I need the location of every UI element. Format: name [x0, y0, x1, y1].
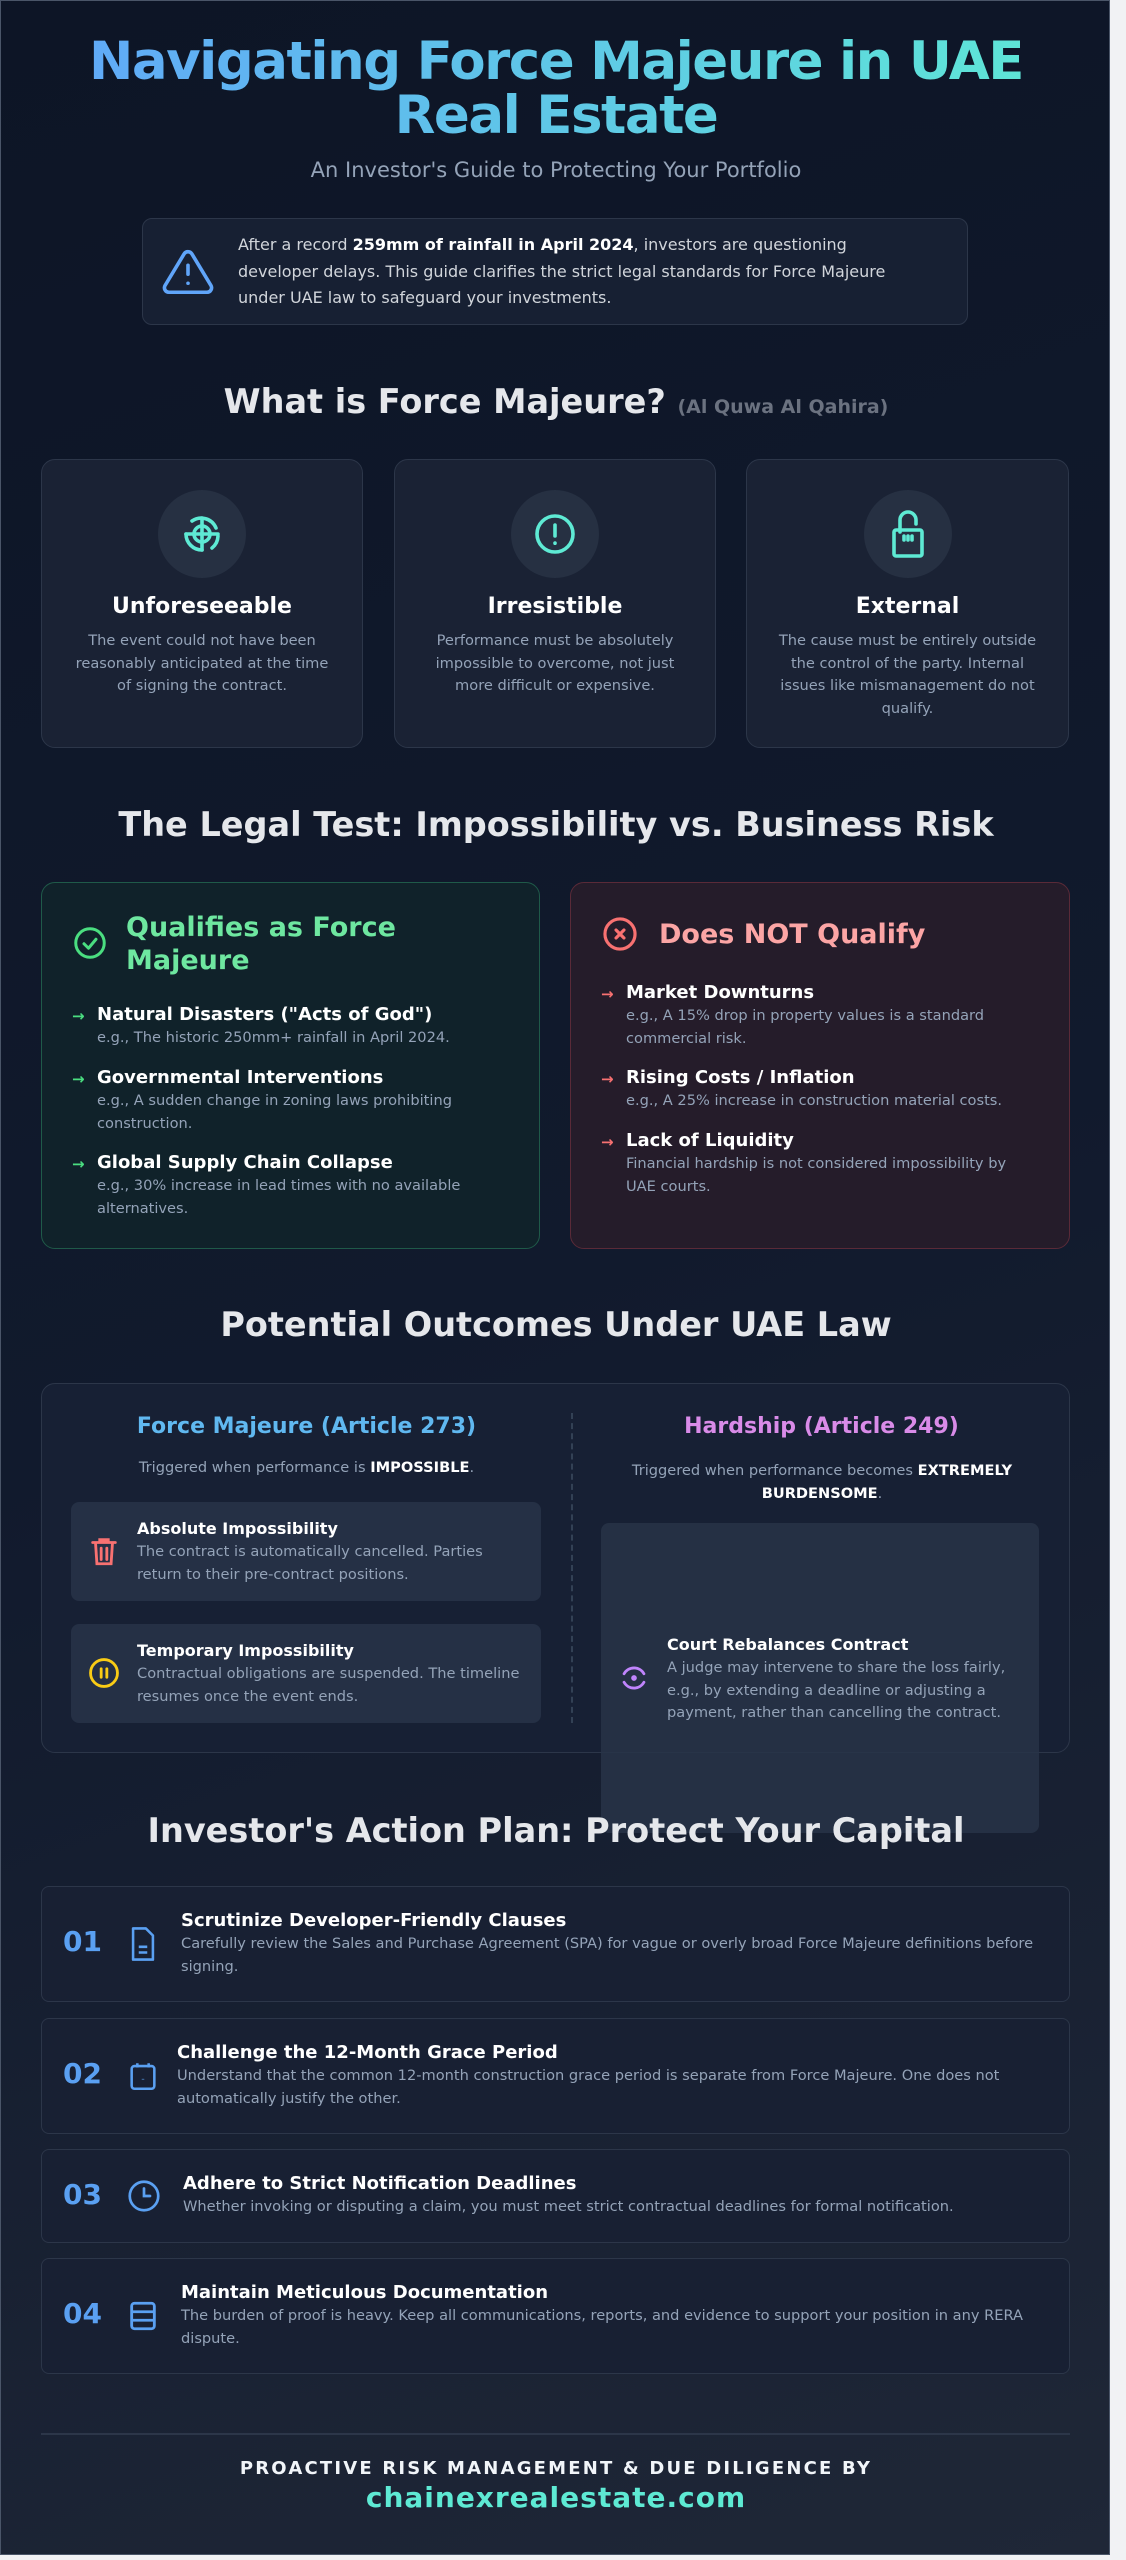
sub-card: court rebalances: Court Rebalances Contract	[667, 1635, 908, 1654]
panel: external	[746, 459, 1069, 748]
heading: what is force majeure: What is Force Majeure? (Al Quwa Al Qahira)	[224, 382, 888, 421]
action 04: The burden of proof is heavy. Keep all communications, reports, and evidence to support your position in any RERA dispute.	[181, 2307, 1023, 2346]
title: Navigating Force Majeure in UAE	[89, 31, 1023, 92]
panel: irresistible: Irresistible	[488, 594, 622, 619]
icon: database	[130, 2302, 156, 2330]
sub-card: temporary	[71, 1624, 541, 1723]
action 02: Challenge the 12-Month Grace Period	[177, 2042, 558, 2063]
panel title	[126, 912, 396, 976]
panel: unforeseeable	[41, 459, 363, 748]
item: Natural Disasters ("Acts of God")	[97, 1004, 432, 1025]
action 01: Scrutinize Developer-Friendly Clauses	[181, 1910, 566, 1931]
item: →	[601, 1070, 614, 1088]
footer: chainexrealestate.com	[366, 2481, 746, 2514]
item: →	[601, 985, 614, 1003]
action 03: Whether invoking or disputing a claim, you must meet strict contractual deadlines for formal notification.	[183, 2198, 954, 2215]
sub-card: temporary: Temporary Impossibility	[137, 1641, 354, 1660]
icon: rebalance	[622, 1666, 646, 1690]
action 03: 03	[63, 2178, 102, 2211]
sub-card: absolute: Absolute Impossibility	[137, 1519, 338, 1538]
action 02	[41, 2018, 1070, 2134]
footer: PROACTIVE RISK MANAGEMENT & DUE DILIGENCE BY	[240, 2458, 872, 2479]
item: →	[72, 1007, 85, 1025]
sub-card: court rebalances	[601, 1523, 1039, 1833]
heading: action plan: Investor's Action Plan: Protect Your Capital	[148, 1811, 964, 1850]
icon: trash	[91, 1538, 117, 1566]
item	[72, 1067, 452, 1132]
heading: outcomes: Potential Outcomes Under UAE Law	[220, 1305, 892, 1344]
divider	[571, 1413, 573, 1723]
item: e.g., The historic 250mm+ rainfall in April 2024.	[97, 1029, 450, 1046]
icon: lock	[864, 490, 952, 578]
action 01: Carefully review the Sales and Purchase Agreement (SPA) for vague or overly broad Force Majeure definitions before signing.	[181, 1935, 1033, 1974]
item: Lack of Liquidity	[626, 1130, 794, 1151]
item: Financial hardship is not considered impossibility by UAE courts.	[626, 1155, 1006, 1194]
panel: external: The cause must be entirely outside the control of the party. Internal issues like mismanagement do not qualify.	[779, 632, 1036, 716]
action 04: 04	[63, 2297, 102, 2330]
title	[1, 35, 1111, 143]
panel title: Majeure	[126, 945, 250, 976]
item: e.g., A 15% drop in property values is a standard commercial risk.	[626, 1007, 984, 1046]
panel: outcomes	[41, 1383, 1070, 1753]
panel: irresistible	[394, 459, 716, 748]
panel: qualifies	[41, 882, 540, 1249]
icon: check circle	[74, 927, 106, 959]
item	[72, 1152, 460, 1216]
panel: unforeseeable: Unforeseeable	[112, 594, 292, 619]
icon: pause	[89, 1658, 119, 1688]
right column title: Hardship (Article 249)	[684, 1414, 959, 1439]
panel: unforeseeable: The event could not have been reasonably anticipated at the time of signing the contract.	[76, 632, 328, 694]
panel: irresistible: Performance must be absolutely impossible to overcome, not just more difficult or expensive.	[436, 632, 674, 694]
icon: x circle	[603, 917, 637, 951]
panel title: Qualifies as Force	[126, 912, 396, 943]
callout: rainfall alert	[142, 218, 968, 325]
item	[72, 1004, 450, 1046]
icon: globe	[158, 490, 246, 578]
item: e.g., 30% increase in lead times with no available alternatives.	[97, 1177, 460, 1216]
item: Rising Costs / Inflation	[626, 1067, 855, 1088]
icon: clock	[128, 2180, 160, 2212]
icon: alert circle	[511, 490, 599, 578]
title: Real Estate	[395, 85, 717, 146]
icon: calendar	[130, 2063, 156, 2090]
panel title: Does NOT Qualify	[659, 919, 925, 950]
icon: document	[132, 1927, 154, 1961]
item	[601, 982, 984, 1046]
panel: external: External	[856, 594, 959, 619]
item: Market Downturns	[626, 982, 814, 1003]
item: e.g., A sudden change in zoning laws prohibiting construction.	[97, 1092, 452, 1132]
trigger text: Triggered when performance becomes EXTREMELY BURDENSOME.	[632, 1462, 1012, 1502]
item: →	[72, 1070, 85, 1088]
sub-card: court rebalances: A judge may intervene to share the loss fairly, e.g., by extending a deadline or adjusting a payment, rather than cancelling the contract.	[667, 1659, 1005, 1721]
action 03	[41, 2149, 1070, 2243]
item: →	[601, 1133, 614, 1151]
action 01: 01	[63, 1925, 102, 1958]
item: e.g., A 25% increase in construction material costs.	[626, 1092, 1002, 1109]
action 04: Maintain Meticulous Documentation	[181, 2282, 548, 2303]
action 02: Understand that the common 12-month construction grace period is separate from Force Majeure. One does not automatically justify the other.	[177, 2067, 999, 2106]
action 01	[41, 1886, 1070, 2002]
panel: does not qualify	[570, 882, 1070, 1249]
sub-card: temporary: Contractual obligations are suspended. The timeline resumes once the event ends.	[137, 1665, 519, 1704]
callout text: After a record 259mm of rainfall in April 2024, investors are questioning developer delays. This guide clarifies the strict legal standards for Force Majeure under UAE law to safeguard your investments.	[238, 235, 885, 307]
trigger text: Triggered when performance is IMPOSSIBLE.	[139, 1459, 474, 1476]
left column title: Force Majeure (Article 273)	[137, 1414, 476, 1439]
item: Governmental Interventions	[97, 1067, 383, 1088]
action 04	[41, 2258, 1070, 2374]
item	[601, 1130, 1006, 1194]
subtitle: An Investor's Guide to Protecting Your Portfolio	[311, 158, 801, 182]
item: →	[72, 1155, 85, 1173]
sub-card: absolute: The contract is automatically cancelled. Parties return to their pre-contract positions.	[137, 1543, 483, 1582]
heading: legal test: The Legal Test: Impossibility vs. Business Risk	[118, 805, 994, 844]
action 02: 02	[63, 2057, 102, 2090]
action 03: Adhere to Strict Notification Deadlines	[183, 2173, 576, 2194]
footer	[240, 2458, 872, 2514]
item: Global Supply Chain Collapse	[97, 1152, 393, 1173]
sub-card: absolute	[71, 1502, 541, 1601]
icon: warning triangle	[162, 250, 214, 294]
item	[601, 1067, 1002, 1109]
